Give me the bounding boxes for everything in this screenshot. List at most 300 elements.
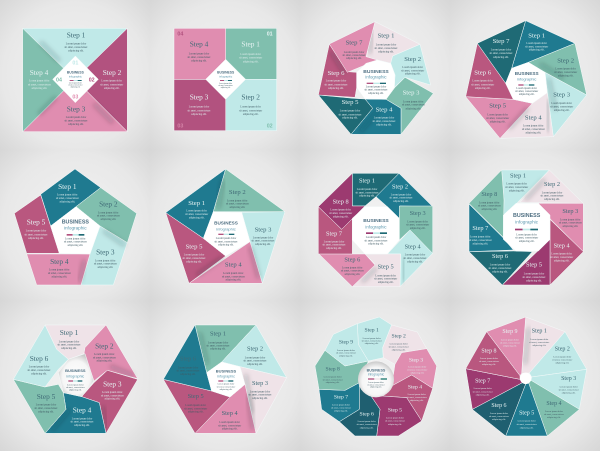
step 2: sit amet, consectetuer [389,345,409,348]
step 3: Step 3 [403,90,420,97]
step 1 [226,28,277,79]
center diamond: 02 [89,77,95,83]
step 7 [329,22,377,72]
step 3: Step 3 [561,376,576,382]
step 1: adipiscing elit. [189,217,205,220]
center hub: sit amet, consectetuer [515,237,538,240]
center hub: sit amet, consectetuer [64,241,87,244]
center hub: sit amet, consectetuer [515,90,538,93]
center hub: Lorem ipsum dolor [65,237,86,240]
step 7: sit amet, consectetuer [343,54,366,57]
step 2: sit amet, consectetuer [244,360,267,363]
step 6 [469,251,532,285]
step 5 [371,396,422,436]
step 8: sit amet, consectetuer [478,205,501,208]
step 3: Lorem ipsum dolor [408,365,427,368]
step 7 [477,21,526,83]
step 1: Lorem ipsum dolor [363,337,381,340]
step 1: Lorem ipsum dolor [208,342,228,345]
center hub [58,354,94,397]
step 5: Lorem ipsum dolor [340,110,360,113]
step 2: Step 2 [555,347,570,353]
step 7: Lorem ipsum dolor [474,387,492,390]
step 2: Lorem ipsum dolor [555,68,576,71]
step 5: sit amet, consectetuer [35,407,58,410]
step 4: Step 4 [225,262,242,269]
step 5 [502,239,550,285]
step 7: Lorem ipsum dolor [332,403,350,406]
step 4: Lorem ipsum dolor [72,417,92,420]
step 5 [14,195,59,253]
step 8: Lorem ipsum dolor [324,376,342,379]
step 1: adipiscing elit. [532,344,547,347]
step 2: Step 2 [392,334,406,340]
step 1: sit amet, consectetuer [56,197,79,200]
step 8: sit amet, consectetuer [329,212,352,215]
center hub: adipiscing elit. [370,386,382,389]
step 8: Step 8 [481,349,497,355]
center hub: BUSINESS [214,221,238,226]
step 3: Lorem ipsum dolor [253,236,273,239]
step 4: sit amet, consectetuer [28,83,51,86]
step 8: Step 8 [326,367,340,373]
step 4 [27,254,90,285]
center hub [207,362,245,397]
step 1: Lorem ipsum dolor [506,183,527,186]
step 5: Lorem ipsum dolor [518,420,536,423]
step 7 [466,369,522,409]
center diamond [206,59,246,99]
step 8: Lorem ipsum dolor [480,357,498,360]
center hub: infographic [216,226,236,231]
step 6: Lorem ipsum dolor [490,412,508,415]
step 5 [318,95,373,134]
step 2: Lorem ipsum dolor [240,106,261,109]
step 3: sit amet, consectetuer [101,394,124,397]
step 1: Lorem ipsum dolor [357,188,377,191]
step 5: adipiscing elit. [186,260,202,263]
step 3: Lorem ipsum dolor [250,390,270,393]
step 4: adipiscing elit. [74,424,90,427]
step 3: Step 3 [67,104,86,113]
center diamond: Lorem ipsum dolor [69,83,82,85]
step 3: Lorem ipsum dolor [560,385,578,388]
step 3: Lorem ipsum dolor [102,391,123,394]
step 8: adipiscing elit. [333,215,349,218]
step 1: Step 1 [188,200,205,207]
step 1: sit amet, consectetuer [185,213,208,216]
step 8: Step 8 [481,191,497,198]
center hub: Lorem ipsum dolor [516,233,537,236]
step 6: adipiscing elit. [475,87,491,90]
center diamond: BUSINESS [217,71,235,75]
step 3 [386,77,433,134]
step 4: Lorem ipsum dolor [523,125,544,128]
step 4: Step 4 [190,40,209,49]
step 7: adipiscing elit. [476,394,490,397]
step 5: sit amet, consectetuer [339,113,362,116]
step 8: Step 8 [333,198,349,205]
step 8: Lorem ipsum dolor [479,201,500,204]
step 4: adipiscing elit. [554,259,570,262]
step 3: sit amet, consectetuer [402,104,425,107]
step 1: Lorem ipsum dolor [66,43,86,46]
step 7: Lorem ipsum dolor [470,236,491,239]
step 2: Step 2 [241,92,260,101]
step 2: Lorem ipsum dolor [98,211,119,214]
step 7: sit amet, consectetuer [469,239,492,242]
step 4: Step 4 [408,385,422,391]
step 5: Step 5 [388,407,402,413]
step 2: sit amet, consectetuer [552,359,573,362]
step 1 [45,325,106,359]
step 6 [466,43,513,99]
step 2: Step 2 [404,56,421,63]
step 1: adipiscing elit. [365,342,379,345]
step 1: Lorem ipsum dolor [240,53,261,56]
step 3: Step 3 [96,247,115,256]
step 1: Step 1 [532,329,547,335]
step 2 [520,170,583,203]
center hub: BUSINESS [62,219,89,225]
step 5: sit amet, consectetuer [184,407,207,410]
step 3: sit amet, consectetuer [550,105,573,108]
step 1: Lorem ipsum dolor [59,340,79,343]
step 5 [13,379,66,433]
step 3: sit amet, consectetuer [249,394,272,397]
step 1: adipiscing elit. [60,200,75,203]
step 1: sit amet, consectetuer [505,186,528,189]
step 2: Step 2 [392,184,408,191]
step 4 [174,28,226,79]
center hub: adipiscing elit. [519,93,535,96]
step 5: Step 5 [188,393,204,400]
step 6: Lorem ipsum dolor [342,266,363,269]
step 8 [466,332,520,379]
center hub: infographic [64,226,87,231]
step 4 [383,375,433,421]
center hub: Lorem ipsum dolor [218,384,235,386]
step 2: sit amet, consectetuer [390,197,413,200]
center hub: BUSINESS [363,69,389,75]
step 8: Lorem ipsum dolor [330,209,351,212]
step 2: Step 2 [544,181,560,188]
step 1 [195,325,256,373]
step 4: sit amet, consectetuer [218,424,241,427]
step 1: Lorem ipsum dolor [186,210,207,213]
center diamond: adipiscing elit. [70,86,81,89]
step 5: sit amet, consectetuer [517,423,537,426]
step 3: Lorem ipsum dolor [95,259,116,262]
center hub: adipiscing elit. [519,240,535,243]
center hub: sit amet, consectetuer [365,89,388,92]
step 2: Step 2 [103,68,122,77]
step 1: Step 1 [58,182,77,191]
step 4: Lorem ipsum dolor [405,254,425,257]
step 6: Step 6 [360,411,374,417]
step 6: sit amet, consectetuer [325,83,348,86]
center diamond: 04 [56,77,62,83]
step 3: Step 3 [562,208,578,215]
step 5: adipiscing elit. [342,117,358,120]
step 7: adipiscing elit. [346,57,362,60]
step 1 [23,28,127,79]
step 7: Lorem ipsum dolor [344,51,364,54]
step 1: adipiscing elit. [68,50,84,53]
center diamond: infographic [219,75,233,79]
step 3 [240,367,287,433]
step 4: adipiscing elit. [526,131,541,134]
step 3: adipiscing elit. [191,113,207,116]
step 5: adipiscing elit. [378,281,394,284]
step 5: Step 5 [526,262,542,269]
step 1: Lorem ipsum dolor [530,338,549,341]
step 2: adipiscing elit. [544,198,560,201]
step 5: adipiscing elit. [520,426,534,429]
step 3: sit amet, consectetuer [188,109,211,112]
step 2 [76,188,137,243]
step 3: Step 3 [410,210,426,217]
step 8: adipiscing elit. [326,381,340,384]
step 4: sit amet, consectetuer [407,396,427,399]
step 5: Step 5 [519,411,534,417]
step 5: adipiscing elit. [188,411,204,414]
step 3: sit amet, consectetuer [252,240,275,243]
panel: four-step squares [174,28,277,131]
center hub: sit amet, consectetuer [217,386,236,388]
step 9: sit amet, consectetuer [500,341,520,344]
center diamond: 03 [72,94,78,100]
step 7: adipiscing elit. [326,247,342,250]
step 5: Lorem ipsum dolor [386,416,404,419]
step 2 [528,43,587,95]
step 4: Step 4 [222,410,238,417]
center diamond: sit amet, consectetuer [68,85,83,87]
step 4: adipiscing elit. [226,279,241,282]
step 1 [352,173,399,206]
step 3: Lorem ipsum dolor [551,102,572,105]
step 9: sit amet, consectetuer [336,352,356,355]
step 1: Lorem ipsum dolor [376,44,396,47]
step 7: Step 7 [326,230,342,237]
step 5: Step 5 [378,263,394,270]
step 4: sit amet, consectetuer [222,275,245,278]
step 3: adipiscing elit. [105,398,120,401]
step 2 [75,28,127,132]
center hub: sit amet, consectetuer [66,387,85,389]
step 3: adipiscing elit. [255,243,271,246]
step 6: Step 6 [474,70,492,77]
step 4 [45,393,106,433]
step 1: adipiscing elit. [61,347,77,350]
step 3: adipiscing elit. [410,371,425,374]
step 3: adipiscing elit. [252,397,268,400]
step 7: sit amet, consectetuer [323,244,346,247]
center diamond: Lorem ipsum dolor [219,83,233,85]
step 1: Step 1 [241,40,260,49]
step 4 [195,384,256,433]
step 7: adipiscing elit. [493,56,509,59]
step 3 [82,370,138,433]
step 3: Lorem ipsum dolor [560,218,581,221]
step 1: adipiscing elit. [378,50,394,53]
step 4: sit amet, consectetuer [550,256,573,259]
center hub: BUSINESS [216,368,237,373]
step 6: Lorem ipsum dolor [29,366,49,369]
step 5 [466,97,532,138]
step 5: Lorem ipsum dolor [36,404,56,407]
step 4: adipiscing elit. [52,275,67,278]
step 5: sit amet, consectetuer [25,233,48,236]
step 4: sit amet, consectetuer [373,120,396,123]
step 4: sit amet, consectetuer [71,421,94,424]
step 2: adipiscing elit. [558,74,574,77]
step 4: Lorem ipsum dolor [374,117,394,120]
step 5 [166,213,226,283]
step 2: Lorem ipsum dolor [542,191,562,194]
step 2: Step 2 [99,199,118,208]
step 4: adipiscing elit. [191,60,207,63]
center hub [357,60,395,99]
step 5: Lorem ipsum dolor [185,404,206,407]
step 2: Lorem ipsum dolor [402,66,423,69]
step 4: sit amet, consectetuer [404,257,427,260]
step 6: Lorem ipsum dolor [490,264,510,267]
step 4 [550,219,583,285]
step 1: sit amet, consectetuer [207,344,230,347]
center hub: infographic [365,75,387,80]
center hub: sit amet, consectetuer [367,384,385,386]
step 4: Step 4 [554,242,570,249]
step 1: sit amet, consectetuer [375,47,398,50]
center hub: adipiscing elit. [368,243,384,246]
step 5 [506,383,547,436]
step 6: Step 6 [30,354,49,363]
step 5: adipiscing elit. [388,423,402,426]
center hub: Lorem ipsum dolor [368,382,384,384]
step 4: Lorem ipsum dolor [219,421,240,424]
step 1: sit amet, consectetuer [65,46,88,49]
step 3: Step 3 [553,92,571,99]
step 2 [213,169,285,212]
step 3: Lorem ipsum dolor [403,100,424,103]
step 5: Step 5 [27,218,46,227]
step 5: Step 5 [342,99,359,106]
step 3: sit amet, consectetuer [559,222,582,225]
step 2: adipiscing elit. [101,218,116,221]
center hub: adipiscing elit. [220,388,233,391]
step 9: adipiscing elit. [339,354,353,357]
step 3: sit amet, consectetuer [407,368,428,371]
step 3: 03 [177,123,183,129]
step 2: adipiscing elit. [405,73,421,76]
center hub: Lorem ipsum dolor [67,384,84,386]
center hub: sit amet, consectetuer [365,239,388,242]
step 1: sit amet, consectetuer [58,344,81,347]
step 2: sit amet, consectetuer [93,356,116,359]
step 3 [399,206,433,254]
center hub [506,62,547,103]
step 1 [41,169,101,226]
step 1: sit amet, consectetuer [362,339,382,342]
step 1: Step 1 [528,32,545,39]
step 7: Step 7 [493,38,510,45]
step 2: adipiscing elit. [243,113,259,116]
step 9: Step 9 [339,340,353,346]
center hub: BUSINESS [65,368,86,373]
step 2: Step 2 [557,57,574,64]
step 4: Lorem ipsum dolor [551,253,572,256]
step 1: Step 1 [67,30,86,39]
step 2: sit amet, consectetuer [239,109,262,112]
panel: nine-step nonagon B [466,317,587,436]
step 7: Step 7 [475,378,490,384]
step 3 [392,349,437,388]
center hub: BUSINESS [367,368,386,372]
panel: eight-step octagon B [469,170,583,285]
step 6: Step 6 [344,256,360,263]
step 1 [366,22,420,63]
step 3: Step 3 [255,226,272,233]
step 5: Lorem ipsum dolor [375,274,396,277]
step 7: Lorem ipsum dolor [491,49,511,52]
step 7: sit amet, consectetuer [473,390,493,393]
step 6: adipiscing elit. [180,373,196,376]
center hub [203,212,250,256]
step 6: adipiscing elit. [328,87,344,90]
step 6: Step 6 [328,70,345,77]
step 8: sit amet, consectetuer [479,360,499,363]
step 2: adipiscing elit. [97,360,112,363]
center hub: Lorem ipsum dolor [516,87,537,90]
center diamond: sit amet, consectetuer [219,85,233,87]
step 4: adipiscing elit. [222,428,238,431]
step 1: 01 [267,32,273,38]
step 2: sit amet, consectetuer [401,69,424,72]
step 3: adipiscing elit. [563,225,578,228]
step 2: adipiscing elit. [104,87,120,90]
step 6: sit amet, consectetuer [28,369,51,372]
step 7: Step 7 [472,225,488,232]
step 4: adipiscing elit. [376,123,392,126]
step 1: Step 1 [210,331,226,338]
center hub: Lorem ipsum dolor [216,237,236,240]
step 4: sit amet, consectetuer [544,413,564,416]
step 2 [529,332,587,377]
step 3: adipiscing elit. [562,391,576,394]
center hub: BUSINESS [513,213,541,219]
step 3: Step 3 [409,357,423,363]
step 7: adipiscing elit. [473,242,488,245]
step 3 [545,72,587,137]
panel: six-step hexagon A [13,325,138,433]
step 1: Lorem ipsum dolor [526,42,547,45]
step 5: sit amet, consectetuer [183,257,206,260]
step 5: Step 5 [489,103,507,110]
step 4 [387,230,433,287]
step 6: adipiscing elit. [492,418,506,421]
step 5 [352,254,401,287]
step 9: Step 9 [502,329,518,335]
step 6 [163,325,212,391]
panel: five-step pentagon B [166,169,285,283]
step 2: adipiscing elit. [392,348,406,351]
step 2: Lorem ipsum dolor [390,342,408,345]
step 4 [23,28,75,132]
step 4 [351,99,401,134]
step 3: adipiscing elit. [406,107,421,110]
step 2: Lorem ipsum dolor [553,356,572,359]
